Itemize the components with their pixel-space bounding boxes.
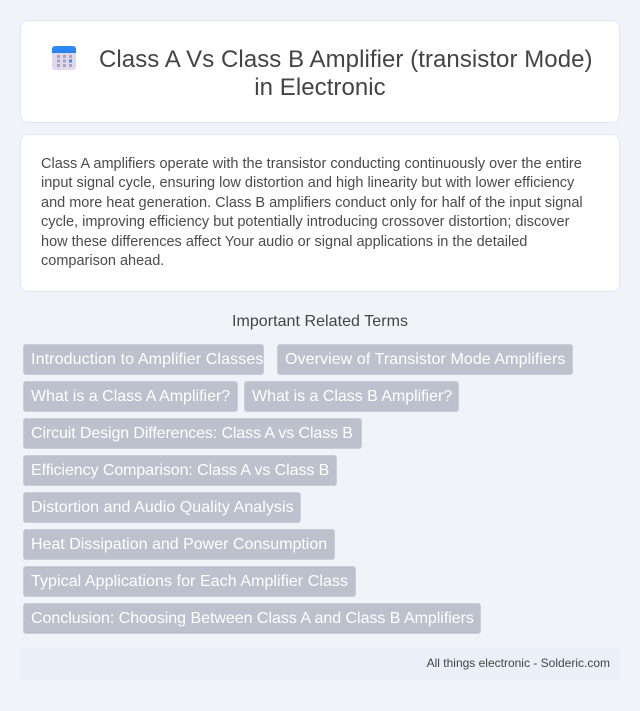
tag	[23, 381, 238, 412]
text block: description: how these differences affect Your audio or signal applications in the detailed	[41, 234, 527, 250]
icon: calendar	[52, 46, 76, 70]
text block: description: cycle, improving efficiency but potentially introducing crossover distortion; discover	[41, 214, 569, 230]
tag: What is a Class B Amplifier?	[252, 388, 452, 405]
tag: Heat Dissipation and Power Consumption	[31, 536, 327, 553]
tag	[23, 344, 264, 375]
title	[99, 46, 593, 101]
tag	[277, 344, 573, 375]
text block: description: and more heat generation. Class B amplifiers conduct only for half of the input signal	[41, 195, 583, 211]
text block: description	[41, 156, 583, 269]
tag: Typical Applications for Each Amplifier Class	[31, 573, 348, 590]
tag list	[23, 344, 573, 634]
tag: Overview of Transistor Mode Amplifiers	[285, 351, 565, 368]
panel: header	[20, 20, 620, 123]
tag: What is a Class A Amplifier?	[31, 388, 230, 405]
tag: Conclusion: Choosing Between Class A and Class B Amplifiers	[31, 610, 474, 627]
tag	[23, 566, 356, 597]
text block: description: comparison ahead.	[41, 253, 164, 269]
tag	[23, 603, 481, 634]
tag: Circuit Design Differences: Class A vs Class B	[31, 425, 353, 442]
panel: description	[20, 134, 620, 292]
text block: description: input signal cycle, ensuring low distortion and high linearity but with lower efficiency	[41, 175, 574, 191]
footer	[20, 647, 620, 681]
tag	[23, 455, 337, 486]
title: Class A Vs Class B Amplifier (transistor Mode)	[99, 46, 593, 73]
tag	[23, 492, 301, 523]
tag: Distortion and Audio Quality Analysis	[31, 499, 294, 516]
tag: Introduction to Amplifier Classes	[31, 351, 264, 368]
tag	[23, 529, 335, 560]
footer: All things electronic - Solderic.com	[427, 656, 610, 670]
tag	[244, 381, 459, 412]
tag	[23, 418, 362, 449]
heading: related terms: Important Related Terms	[232, 313, 408, 330]
tag: Efficiency Comparison: Class A vs Class B	[31, 462, 329, 479]
title: in Electronic	[254, 74, 386, 101]
text block: description: Class A amplifiers operate with the transistor conducting continuously over the entire	[41, 156, 582, 172]
